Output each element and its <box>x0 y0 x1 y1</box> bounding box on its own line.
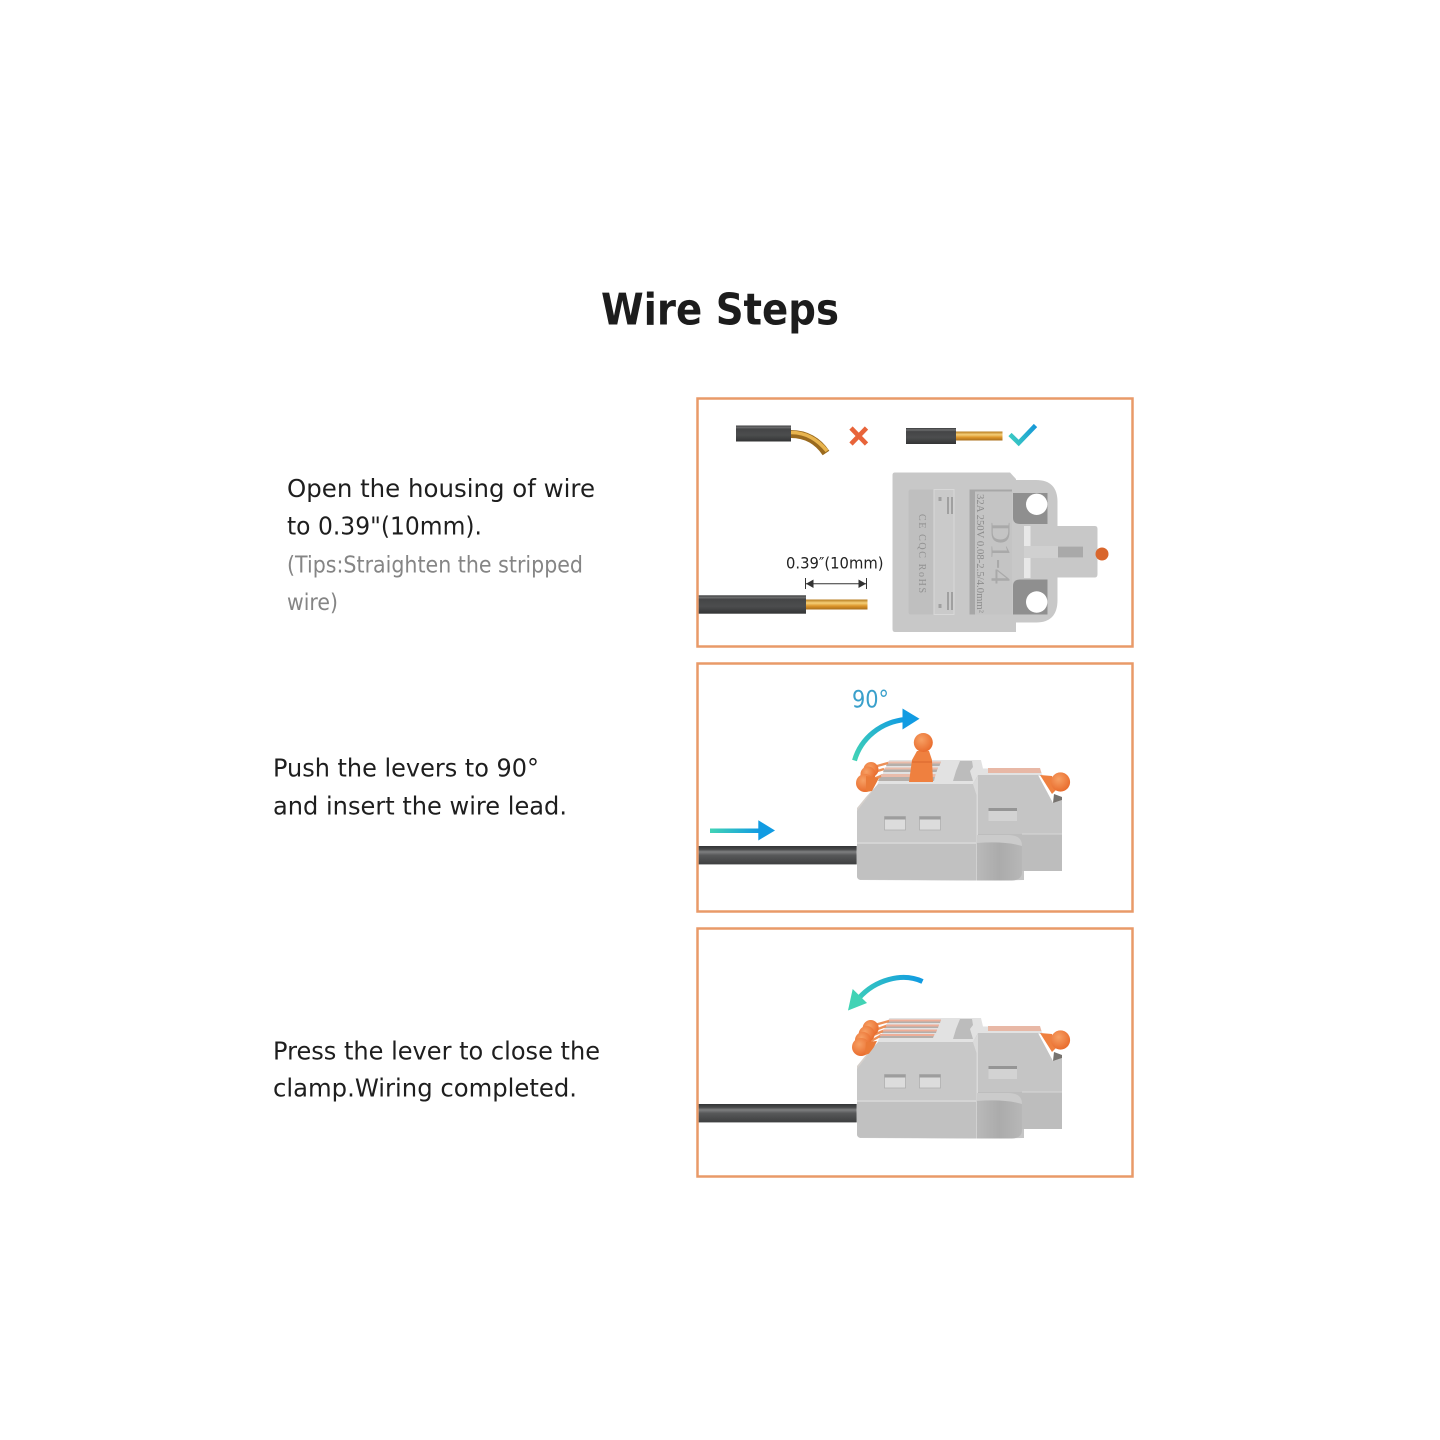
icon: cross mark <box>851 428 866 444</box>
step 3 text: clamp.Wiring completed. <box>273 1074 577 1102</box>
dimension label: 0.39″(10mm) <box>786 554 884 572</box>
front and right faces <box>857 784 977 880</box>
rear levers <box>856 762 888 792</box>
wire <box>699 846 857 864</box>
clip bump <box>977 1094 1022 1138</box>
dimension arrow <box>806 578 866 589</box>
clip bump <box>977 836 1022 880</box>
panel: strip the wire <box>698 398 1132 646</box>
step 1 text: wire) <box>287 588 338 616</box>
step 2 text: and insert the wire lead. <box>273 792 567 820</box>
front and right faces <box>857 1042 977 1138</box>
title: Wire Steps <box>601 286 839 336</box>
right lever <box>1040 772 1070 794</box>
left ledge <box>857 784 878 811</box>
step 1 text <box>287 474 595 616</box>
connector markings: 32A 250V 0.08-2.5/4.0mm² <box>974 494 985 613</box>
connector markings: CE CQC RoHS <box>916 514 927 593</box>
step 2 text: Push the levers to 90° <box>273 754 539 782</box>
step 1 text: Open the housing of wire <box>287 474 595 503</box>
panel: push levers <box>698 664 1132 912</box>
stripped wire <box>699 595 868 614</box>
step 2 text <box>273 754 567 820</box>
icon: straight wire (correct) <box>906 428 1002 444</box>
connector top view <box>892 472 1108 632</box>
top faces <box>878 1018 1043 1042</box>
angle label: 90° <box>852 686 889 714</box>
step 3 text: Press the lever to close the <box>273 1036 600 1066</box>
arrow: lever rotation <box>854 708 920 760</box>
arrow: lever closing <box>848 977 922 1010</box>
raised lever <box>909 733 933 782</box>
icon: bent wire (wrong) <box>736 426 827 453</box>
connector with raised lever <box>856 733 1070 880</box>
windows <box>884 1066 1017 1088</box>
connector markings: D1-4 <box>986 522 1016 585</box>
panel: press lever closed <box>698 928 1132 1176</box>
closed levers <box>852 1020 889 1056</box>
arrow: wire insertion <box>710 820 775 840</box>
windows <box>884 808 1017 830</box>
right lever <box>1040 1030 1070 1052</box>
connector markings <box>916 494 1016 613</box>
wire <box>699 1104 857 1122</box>
connector with closed levers <box>852 1018 1070 1138</box>
icon: check mark <box>1010 426 1036 443</box>
step 3 text <box>273 1036 600 1102</box>
top faces <box>878 760 1043 784</box>
step 1 text: to 0.39"(10mm). <box>287 512 482 540</box>
left ledge <box>857 1042 878 1069</box>
step 1 text: (Tips:Straighten the stripped <box>287 550 583 578</box>
